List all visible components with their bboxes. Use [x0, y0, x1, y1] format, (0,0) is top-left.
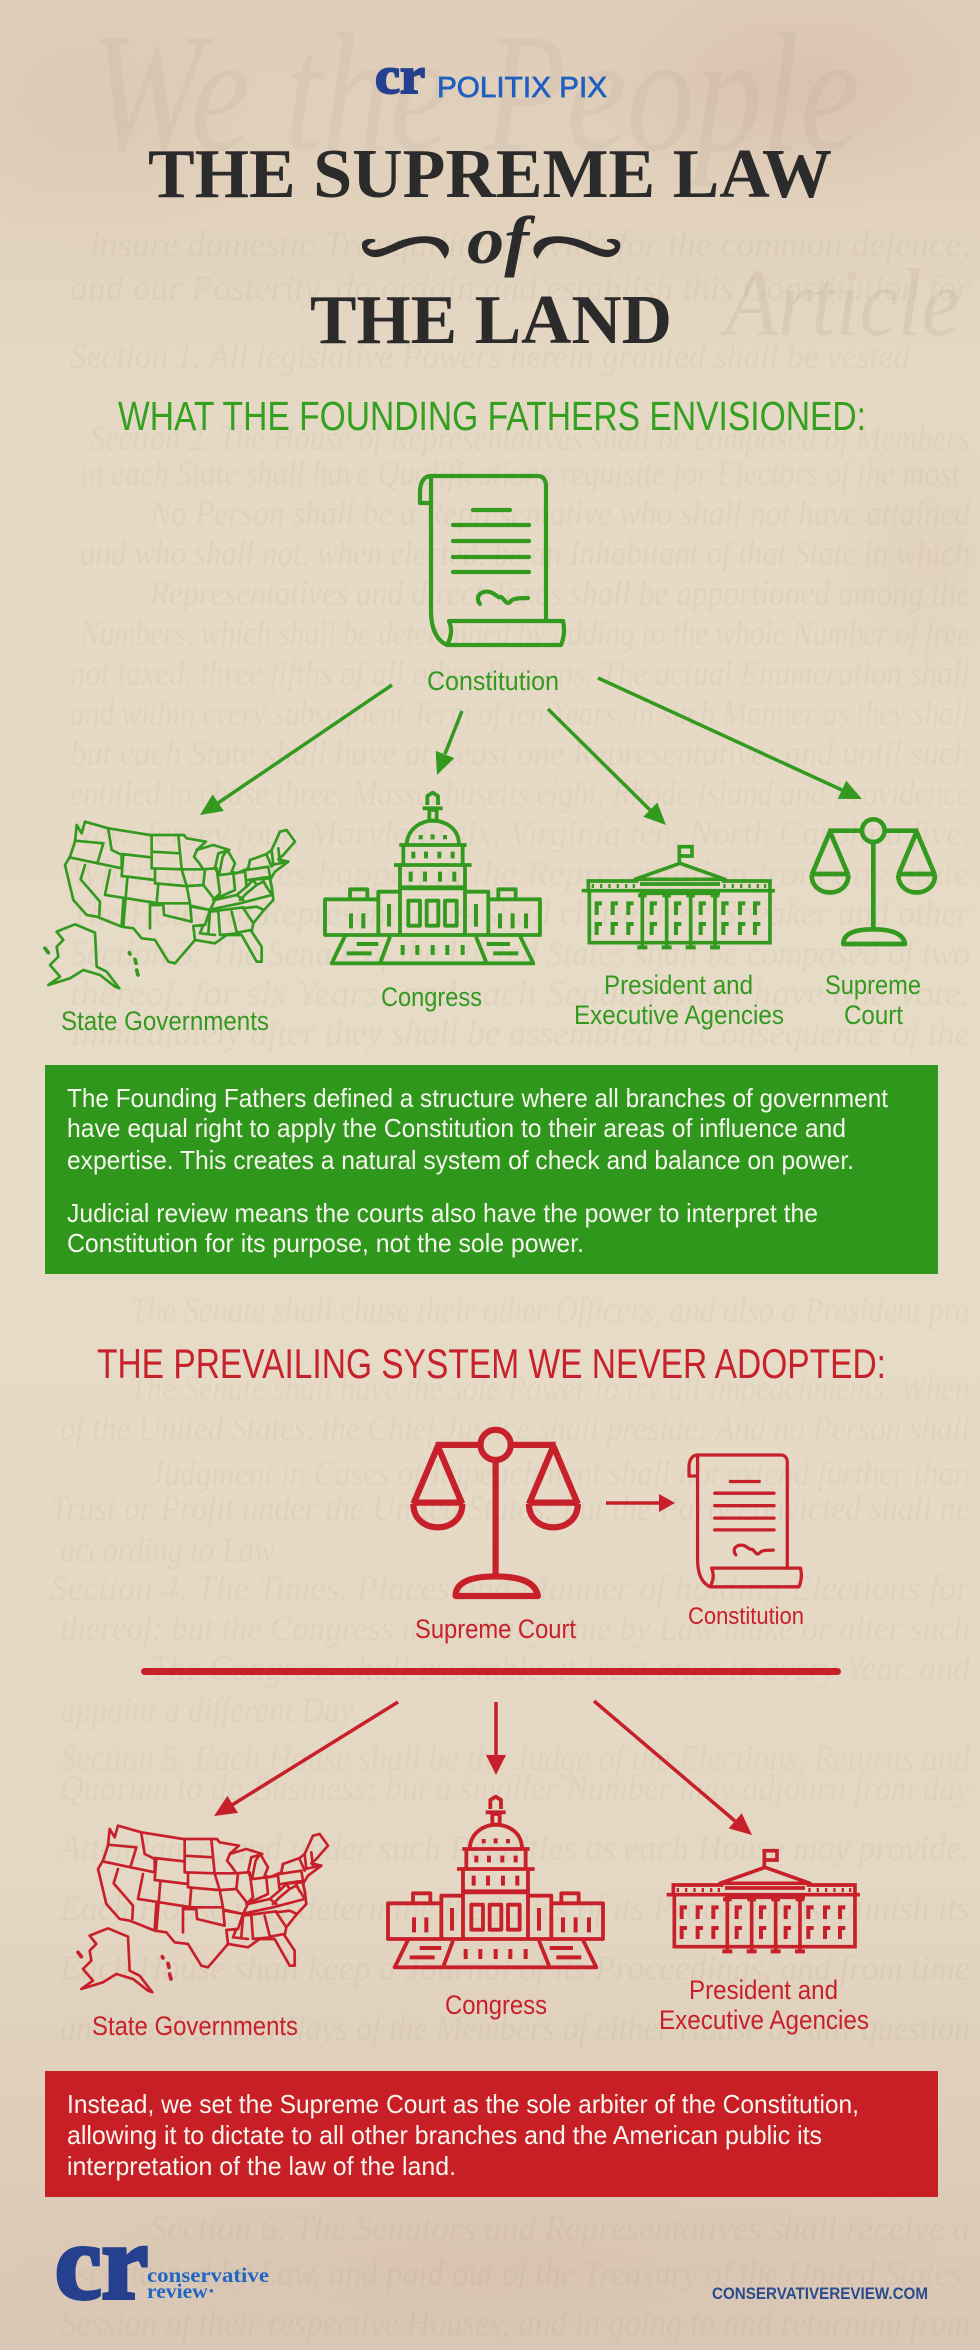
label: state governments: State Governments [61, 1006, 269, 1036]
text: When vacancies happen in the Representation from any State [70, 853, 970, 893]
arrow: to president [548, 709, 666, 825]
logo: conservative review [55, 2204, 269, 2321]
label: congress: Congress [445, 1990, 547, 2020]
arrow: court to constitution [606, 1494, 675, 1512]
panel: green explanation box: have equal right to apply the Constitution to their areas of influence and [67, 1113, 846, 1143]
arrow: to congress [436, 711, 462, 775]
arrow: to supreme court [598, 678, 862, 799]
text: and our Posterity, do ordain and establish this Constitution for [70, 268, 971, 308]
text: Section 1. All legislative Powers herein granted shall be vested [70, 336, 911, 376]
icon: US map [78, 1826, 328, 1992]
icon: capitol [388, 1797, 603, 1967]
label: constitution: Constitution [688, 1603, 804, 1630]
panel: red explanation box: allowing it to dictate to all other branches and the American public its [67, 2120, 822, 2150]
title [148, 136, 832, 359]
label: supreme court: Court [844, 1000, 903, 1030]
icon: white house [582, 847, 775, 947]
icon: white house [667, 1851, 860, 1951]
label: president and executive agencies: Executive Agencies [574, 1000, 784, 1030]
label: president and executive agencies [574, 970, 784, 1030]
arrow: to state governments [200, 685, 392, 815]
panel: founders' diagram [45, 476, 935, 1036]
divider bar [141, 1668, 841, 1675]
title: THE SUPREME LAW [148, 136, 832, 213]
label: congress: Congress [381, 982, 482, 1012]
panel: prevailing system diagram [78, 1430, 869, 2041]
text: New Jersey four, Maryland six, Virginia ten, North Carolina five, [69, 813, 970, 853]
text: Article [720, 249, 960, 356]
panel: red explanation box [45, 2071, 938, 2197]
label: supreme court [825, 970, 921, 1030]
panel: red explanation box: Instead, we set the Supreme Court as the sole arbiter of the Constitution, [67, 2089, 859, 2119]
logo: conservative review: review· [147, 2279, 215, 2303]
footer url: CONSERVATIVEREVIEW.COM [712, 2284, 928, 2303]
text: thereof, for six Years; and each Senator shall have one Vote. [70, 973, 970, 1013]
label: president and executive agencies: President and [689, 1975, 838, 2005]
icon: constitution scroll [420, 476, 564, 645]
text: insure domestic Tranquility, provide for the common defence, [90, 224, 970, 264]
label: president and executive agencies [659, 1975, 869, 2035]
label: supreme court: Supreme Court [415, 1614, 576, 1644]
panel: green explanation box: Judicial review means the courts also have the power to interpret the [67, 1198, 818, 1228]
text: Immediately after they shall be assembled in Consequence of the [69, 1013, 970, 1053]
title: of [467, 202, 536, 278]
icon: constitution scroll [689, 1455, 801, 1587]
arrow: to president [594, 1701, 752, 1835]
label: constitution: Constitution [427, 666, 559, 696]
title: THE LAND [310, 282, 672, 359]
label: president and executive agencies: Executive Agencies [659, 2005, 869, 2035]
icon: US map [45, 822, 295, 988]
icon: scales of justice [413, 1430, 578, 1596]
logo: conservative review: cr [55, 2204, 148, 2321]
logo: CR Politix Pix [375, 48, 607, 105]
panel: green explanation box: The Founding Fathers defined a structure where all branches of government [67, 1083, 889, 1113]
arrow: to state governments [214, 1702, 398, 1816]
logo: CR Politix Pix: cr [375, 48, 425, 105]
icon: capitol [325, 793, 540, 963]
label: supreme court: Supreme [825, 970, 921, 1000]
icon: scales of justice [812, 819, 935, 944]
logo: conservative review: conservative [147, 2263, 269, 2287]
panel: green explanation box [45, 1065, 938, 1274]
text: Section 4. The Times, Places and Manner of holding Elections for [50, 1568, 971, 1608]
panel: green explanation box: Constitution for its purpose, not the sole power. [67, 1228, 584, 1258]
panel: red explanation box: interpretation of the law of the land. [67, 2151, 456, 2181]
text: according to Law. [60, 1530, 280, 1570]
text: appoint a different Day. [60, 1690, 360, 1730]
label: state governments: State Governments [92, 2011, 298, 2041]
label: president and executive agencies: President and [604, 970, 753, 1000]
arrow: to congress [486, 1702, 506, 1775]
panel: green explanation box: expertise. This creates a natural system of check and balance on power. [67, 1145, 854, 1175]
logo: CR Politix Pix: POLITIX PIX [437, 72, 607, 104]
